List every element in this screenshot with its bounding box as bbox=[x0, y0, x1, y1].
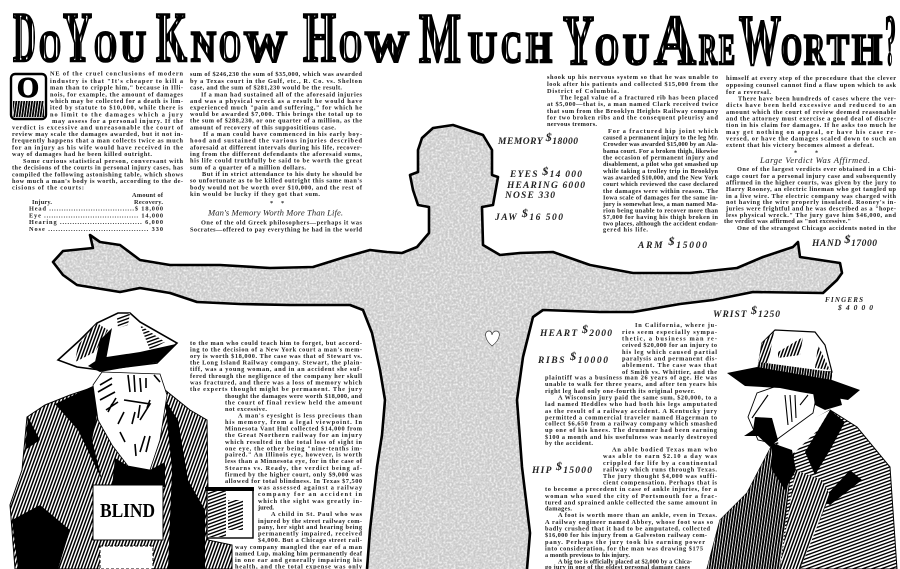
text: lower left panel: to the man who could teach him to forget, but accord- bbox=[190, 340, 362, 347]
moustache bbox=[744, 417, 778, 447]
body part value labels: $ bbox=[844, 232, 851, 246]
text column 3: look after his patients and collected $15,000 from the bbox=[547, 81, 718, 88]
text column 4 end: affirmed in the higher courts, was given by the jury to bbox=[726, 180, 896, 186]
text column 4: There have been hundreds of cases where the ver- bbox=[738, 96, 896, 102]
text: lower right panel bbox=[545, 322, 718, 569]
title: C bbox=[501, 25, 522, 72]
text: lower right panel: thetic, a business man re- bbox=[622, 336, 717, 342]
text column 3: Crowder was awarded $15,000 by an Ala- bbox=[603, 141, 718, 148]
text: lower right panel: of Smith vs. Whittier, and the bbox=[622, 369, 717, 376]
text: lower left panel: permanently impaired, received bbox=[258, 530, 362, 538]
text: lower right panel: In California, where ju- bbox=[635, 322, 717, 329]
sign: blind bbox=[93, 485, 163, 540]
text column 1: Some curious statistical person, conversant with bbox=[23, 158, 183, 165]
text column 2: would be awarded $7,000. This brings the total up to bbox=[190, 111, 362, 118]
hat brim bbox=[727, 367, 860, 400]
recovery table: Hearing ................................. 6,000 bbox=[29, 219, 163, 226]
body part value labels: 16 500 bbox=[529, 213, 563, 223]
text column 4 end: in a live wire. The electric company was charged with bbox=[726, 193, 896, 200]
text column 1: compiled the following astonishing table, which shows bbox=[12, 171, 184, 178]
text column 2 end: One of the old Greek philosophers—perhaps it was bbox=[201, 220, 363, 226]
title: W bbox=[244, 24, 287, 71]
text column 2: * bbox=[281, 200, 284, 207]
text column 4 end: not having the wire properly insulated. Rooney's in- bbox=[726, 199, 896, 206]
text: lower left panel: the Great Northern railway for an injury bbox=[225, 432, 363, 439]
text column 4 end: One of the largest verdicts ever obtained in a Chi- bbox=[737, 166, 896, 173]
title: W bbox=[365, 24, 409, 71]
text: lower right panel: was able to earn $2.10 a day was bbox=[603, 453, 718, 460]
text column 1: man than to cripple him," because in Illi- bbox=[50, 85, 183, 92]
text: lower right panel: A railway engineer named Abbey, whose foot was so bbox=[545, 519, 713, 526]
text column 3: disablement, a pilot who got smashed up bbox=[603, 161, 718, 168]
text: lower left panel: way company mangled the ear of a man bbox=[235, 544, 362, 551]
text: lower right panel: a month previous to his injury. bbox=[545, 552, 630, 559]
text column 4: extent that his victory becomes almost a defeat. bbox=[726, 142, 874, 149]
text: lower right panel: railway which runs through Texas. bbox=[603, 466, 717, 474]
text column 2: hood and sustained the various injuries described bbox=[190, 138, 362, 145]
text column 2 end bbox=[190, 220, 363, 234]
text: lower left panel: the Long Island Railway company. Stewart, the plain- bbox=[190, 360, 362, 366]
body part value labels: 14 000 bbox=[550, 170, 582, 180]
text column 1: ited by statute to $10,000, while there is bbox=[50, 105, 184, 112]
text: lower right panel: ablement. The case was that bbox=[622, 362, 718, 369]
text column 2: body would not be worth over $10,000, and the rest of bbox=[190, 184, 363, 191]
text: lower right panel: paralysis and permanent dis- bbox=[622, 356, 717, 362]
text: lower left panel: one eye, the other being "nine-tenths im- bbox=[225, 446, 362, 452]
title: O bbox=[339, 24, 362, 71]
text column 3: was awarded $10,000, and the New York bbox=[603, 174, 718, 182]
text: lower left panel: less than a Minnesota eye, for in the case of bbox=[225, 458, 363, 465]
body part value labels: 17000 bbox=[851, 239, 877, 249]
text column 3: Iowa scale of damages for the same in- bbox=[603, 194, 718, 202]
vest and dark lapel bbox=[707, 443, 795, 569]
body part value labels: HIP bbox=[532, 466, 551, 476]
text: lower right panel: cient compensation. Perhaps that is bbox=[603, 480, 718, 486]
text: lower left panel: firmed by the higher court, only $9,000 was bbox=[225, 472, 363, 478]
text: lower left panel: his memory, from a legal viewpoint. In bbox=[225, 419, 362, 426]
coat bbox=[707, 410, 897, 569]
recovery table: Eye ....................................... 14,000 bbox=[29, 212, 163, 220]
text column 2: If a man could have commenced in his early boy- bbox=[203, 131, 362, 138]
body part value labels: EYES bbox=[510, 170, 538, 180]
illustration: man in hat bbox=[707, 330, 897, 569]
text column 3: $7,000 for having his thigh broken in bbox=[603, 214, 718, 221]
text: lower left panel: thought the damages were worth $18,000, and bbox=[225, 393, 362, 400]
title: U bbox=[120, 24, 146, 71]
text: lower left panel: $4,000. But a Chicago street rail- bbox=[258, 537, 362, 544]
text: lower left panel: company for an accident in bbox=[258, 491, 362, 498]
recovery table: Recovery. bbox=[134, 199, 163, 206]
beard bbox=[93, 372, 167, 470]
title bbox=[13, 0, 896, 80]
text: lower right panel: to become a precedent in case of ankle injuries, for a bbox=[545, 486, 718, 493]
text column 1: industry is that "It's cheaper to kill a bbox=[50, 78, 184, 85]
text: lower left panel: ing to the decision of a New York court a man's mem- bbox=[190, 346, 362, 354]
text column 2: his life could truthfully be said to be worth the great bbox=[190, 158, 363, 165]
body silhouette bbox=[53, 125, 842, 569]
text column 2: aforesaid at different intervals during his life, recover- bbox=[190, 144, 362, 151]
text column 3: District of Columbia. bbox=[547, 88, 619, 95]
recovery table: Head ...................................$ 18,000 bbox=[29, 206, 163, 212]
recovery table: Amount of bbox=[132, 192, 164, 199]
body part value labels: NOSE 330 bbox=[504, 191, 555, 201]
crown hatching bbox=[758, 332, 830, 370]
text: lower right panel: $16,000 for his injury from a Galveston railway com- bbox=[545, 532, 707, 539]
text column 2: by a Texas court in the Gulf, etc., R. Co. vs. Shelton bbox=[190, 78, 362, 85]
text column 2: * bbox=[270, 200, 273, 207]
text: lower left panel: A man's eyesight is less precious than bbox=[238, 412, 362, 420]
text column 3: shook up his nervous system so that he was unable to bbox=[547, 74, 718, 81]
text: lower right panel: $100 a month and his usefulness was nearly destroyed bbox=[545, 434, 717, 441]
scarf bbox=[100, 546, 153, 569]
text column 1: the decisions of the courts in personal injury cases, has bbox=[12, 165, 184, 172]
text: lower right panel: The jury thought $4,000 was suffi- bbox=[603, 473, 717, 480]
text column 3: gered his life. bbox=[603, 226, 648, 234]
text: lower right panel: collect $6,650 from a railway company which smashed bbox=[545, 420, 717, 428]
title: R bbox=[699, 27, 718, 74]
title: A bbox=[654, 2, 696, 80]
text column 2: experienced much "pain and suffering," for which he bbox=[190, 105, 362, 112]
text column 3: the damages were within reason. The bbox=[603, 188, 718, 195]
text column 2: sum of $246,230 the sum of $35,000, which was awarded bbox=[190, 71, 362, 78]
recovery table: Injury. bbox=[32, 199, 52, 206]
text: lower right panel: A big toe is officially placed at $2,000 by a Chica- bbox=[558, 558, 692, 566]
text: lower right panel: tured and sprained ankle collected the same amount in bbox=[545, 500, 717, 506]
title: W bbox=[739, 2, 781, 80]
text column 1: way of damages had he been killed outright. bbox=[12, 151, 152, 158]
text column 4: may get nothing on appeal, or have his case re- bbox=[726, 129, 896, 136]
text: lower left panel: tiff, was a young woman, and in an accident she suf- bbox=[190, 366, 362, 373]
text column 3: caused a permanent injury to the leg Mr. bbox=[603, 134, 718, 142]
body part value labels: 10000 bbox=[578, 356, 608, 366]
text column 4 end bbox=[724, 166, 897, 232]
hat band bbox=[758, 362, 832, 382]
text: lower right panel: his leg which caused partial bbox=[622, 349, 717, 356]
text column 4: * bbox=[815, 150, 818, 156]
hat crown bbox=[758, 330, 832, 372]
text: lower left panel: fered through the negligence of the company her skull bbox=[190, 373, 362, 380]
title: R bbox=[804, 27, 826, 74]
title: H bbox=[303, 0, 336, 77]
face hatching bbox=[752, 395, 808, 425]
dark coat shadows bbox=[12, 385, 205, 569]
chest shadow bbox=[112, 458, 165, 487]
text: lower right panel: woman who sued the city of Portsmouth for a frac- bbox=[545, 493, 717, 500]
text: lower left panel: pany, her sight and hearing being bbox=[258, 524, 363, 531]
text column 4: and the attorney must exercise a good deal of discre- bbox=[726, 116, 896, 122]
text column 2: sum of a quarter of a million dollars. bbox=[190, 164, 306, 171]
title: K bbox=[156, 0, 187, 77]
body part value labels: FINGERS bbox=[825, 296, 863, 304]
text column 2 end: Socrates—offered to pay everything he had in the world bbox=[190, 226, 362, 234]
text column 4 end: cago court for a personal injury case and subsequently bbox=[726, 173, 897, 180]
text column 4: opposing counsel cannot find a flaw upon which to ask bbox=[726, 82, 896, 89]
text: lower left panel: which resulted in the total loss of sight in bbox=[225, 439, 362, 446]
text: lower right panel: A foot is worth more than an ankle, even in Texas. bbox=[558, 512, 717, 519]
text: lower left panel: Minnesota Vant Hul collected $14,000 from bbox=[225, 426, 363, 432]
text: lower right panel: badly crushed that it had to be amputated, collected bbox=[545, 526, 710, 532]
text column 3: court which reviewed the case declared bbox=[603, 181, 718, 188]
text: lower right panel: right leg had only one-fourth its original power. bbox=[545, 388, 695, 395]
body part value labels: $ bbox=[555, 459, 562, 473]
title: U bbox=[468, 25, 497, 72]
text: lower right panel: damages. bbox=[545, 506, 572, 512]
text: lower left panel: the court of final review held the amount bbox=[225, 400, 363, 406]
body part value labels: 1250 bbox=[758, 310, 780, 320]
text: lower right panel: into consideration, for the man was drawing $175 bbox=[545, 546, 703, 552]
body part value labels: WRIST bbox=[713, 310, 747, 320]
heading: large verdict: Large Verdict Was Affirmed. bbox=[759, 155, 870, 165]
text column 4 end: the verdict was affirmed as "not excessive." bbox=[724, 218, 851, 225]
body part value labels: $4000 bbox=[837, 303, 873, 312]
text column 2: so unfortunate as to be killed outright this same man's bbox=[190, 178, 363, 185]
text: lower right panel: lad named Heddles who had both his legs amputated bbox=[545, 401, 717, 408]
text column 4 end: One of the strangest Chicago accidents noted in the bbox=[737, 225, 896, 232]
text column 4 end: less physical wreck." The jury gave him $46,000, and bbox=[726, 212, 896, 219]
text: lower right panel: up one of his knees. The drummer had been earning bbox=[545, 427, 718, 434]
text: lower left panel: the experts thought might be permanent. The jury bbox=[190, 386, 363, 393]
text column 1: which may be collected for a death is lim- bbox=[50, 98, 183, 105]
text: lower left panel: not excessive. bbox=[225, 406, 267, 413]
text column 3: the occasion of permanent injury and bbox=[603, 154, 718, 162]
text column 4: dicts have been held excessive and reduced to an bbox=[726, 102, 896, 109]
text: lower right panel: plaintiff was a business man 26 years of age. He was bbox=[545, 374, 718, 382]
title: N bbox=[191, 24, 216, 71]
text: lower left panel: was assessed against a railway bbox=[258, 484, 363, 492]
body part value labels: $ bbox=[569, 349, 576, 363]
lapel hatching bbox=[780, 470, 830, 569]
body part value labels: HAND bbox=[812, 239, 841, 249]
text column 4: for a reversal. bbox=[726, 89, 771, 96]
text column 4: himself at every step of the procedure that the clever bbox=[726, 75, 896, 82]
body part value labels: 18000 bbox=[552, 137, 578, 147]
text column 2: But if in strict attendance to his duty he should be bbox=[202, 171, 362, 178]
body part value labels: MEMORY bbox=[498, 137, 542, 147]
text column 4: amount which the court of review deemed reasonable bbox=[726, 109, 896, 116]
text column 3: jury is somewhat less, a man named Ma- bbox=[602, 201, 718, 208]
text: lower right panel: unable to walk for three years, and after ten years his bbox=[545, 381, 718, 388]
text column 3: for two broken ribs and the consequent pleurisy and bbox=[547, 114, 718, 122]
hair bbox=[812, 386, 842, 410]
recovery table: Nose ........................................ 330 bbox=[29, 226, 163, 233]
body part value labels: RIBS bbox=[538, 356, 565, 366]
text column 1 bbox=[12, 70, 184, 192]
text column 2: the sum of $288,230, or one quarter of a million, as the bbox=[190, 118, 362, 125]
title: E bbox=[719, 27, 735, 74]
text: lower right panel: An able bodied Texas man who bbox=[612, 446, 717, 454]
title: M bbox=[419, 0, 461, 78]
text column 1: may assess for a personal injury. If the bbox=[52, 118, 183, 125]
text: lower left panel: A child in St. Paul who was bbox=[271, 511, 363, 518]
text: lower right panel: permitted a commercial traveler named Hagerman to bbox=[545, 414, 717, 422]
recovery table bbox=[29, 192, 164, 233]
title: H bbox=[526, 25, 552, 72]
body part value labels: $ bbox=[521, 206, 528, 220]
title: Y bbox=[563, 2, 594, 80]
text: lower left panel: injured by the street railway com- bbox=[258, 518, 362, 525]
text column 3: The legal value of a fractured rib has been placed bbox=[560, 94, 718, 102]
text column 4 bbox=[726, 75, 896, 156]
text column 2: amount of recovery of this supposititious case. bbox=[190, 124, 336, 131]
text column 3: nervous tremors. bbox=[547, 121, 597, 128]
body part value labels: $ bbox=[541, 164, 548, 178]
body part value labels: JAW bbox=[495, 213, 516, 223]
text column 4 end: Harry Rooney, an electric lineman who got tangled up bbox=[726, 186, 896, 193]
text: lower right panel: crippled for life by a continental bbox=[603, 460, 717, 467]
face bbox=[748, 385, 817, 443]
text column 4 end: juries were frightful and he was described as a "hope- bbox=[725, 206, 896, 212]
text: lower left panel: jured. bbox=[257, 504, 274, 512]
drop cap O bbox=[11, 73, 46, 119]
body part value labels: ARM bbox=[638, 241, 663, 251]
text column 1: for an injury as his wife would have received in the bbox=[12, 144, 183, 151]
hat hatching bbox=[75, 323, 108, 362]
hat band bbox=[88, 328, 176, 372]
text column 3: that sum from the Brooklyn Heights Railway company bbox=[547, 108, 719, 115]
text column 2: and was a physical wreck as a result he would have bbox=[190, 98, 362, 105]
text: lower left panel: ory is worth $18,000. The case was that of Stewart vs. bbox=[190, 353, 362, 360]
text column 2: case, and the sum of $281,230 would be the result. bbox=[190, 85, 342, 92]
text column 2 bbox=[190, 71, 363, 207]
text: lower left panel: which the sight was greatly in- bbox=[258, 498, 362, 505]
text column 4: tion in his claim for damages. If he asks too much he bbox=[726, 122, 896, 129]
body part value labels: HEARING 6000 bbox=[506, 181, 585, 191]
title: O bbox=[595, 27, 619, 74]
sign text: BLIND bbox=[100, 500, 155, 522]
text column 1: NE of the cruel conclusions of modern bbox=[50, 70, 183, 78]
text: lower right panel: ries seem especially sympa- bbox=[622, 329, 717, 336]
body part value labels: $ bbox=[668, 234, 675, 248]
text: lower left panel: allowed for total blindness. In Texas $7,500 bbox=[225, 478, 362, 485]
text: lower left panel: paired." An Illinois eye, however, is worth bbox=[225, 452, 362, 458]
text column 1: how much a man's body is worth, according to the de- bbox=[12, 178, 183, 185]
text column 1: nois, for example, the amount of damages bbox=[50, 91, 184, 98]
text column 1: verdict is excessive and unreasonable the court of bbox=[12, 124, 184, 131]
illustration: blind man bbox=[10, 313, 254, 569]
body part value labels: HEART bbox=[540, 329, 577, 339]
collar bbox=[777, 410, 830, 460]
hat crease bbox=[117, 313, 165, 350]
text: lower left panel: was fractured, and there was a loss of memory which bbox=[190, 380, 362, 386]
text column 1: frequently happens that a man collects twice as much bbox=[12, 138, 183, 145]
title: H bbox=[852, 27, 882, 74]
icon: heart bbox=[486, 331, 499, 346]
title: U bbox=[623, 27, 649, 74]
text column 2: kin would be lucky if they got that sum. bbox=[190, 191, 320, 198]
title: Y bbox=[63, 0, 92, 77]
text column 4: versed, or have the damages scaled down to such an bbox=[726, 136, 896, 142]
face and beard hatching bbox=[98, 375, 160, 456]
body part value labels: 15000 bbox=[676, 241, 707, 251]
text: lower right panel: as the result of a railway accident. A Kentucky jury bbox=[545, 408, 718, 415]
title: O bbox=[39, 24, 61, 71]
heading: memory: Man's Memory Worth More Than Life. bbox=[207, 208, 343, 218]
text: lower left panel: in one ear and generally impairing his bbox=[235, 557, 363, 564]
text column 1: no limit to the damages which a jury bbox=[50, 111, 184, 118]
text column 3: two places, although the accident endan- bbox=[603, 220, 718, 228]
text column 1: review may scale the damages awarded, but it not in- bbox=[12, 131, 183, 138]
drop cap O: O bbox=[17, 73, 39, 104]
body part value labels: 2000 bbox=[588, 329, 612, 339]
text: lower left panel bbox=[190, 340, 363, 569]
text: lower right panel: pany. Perhaps the jury took his earning power bbox=[545, 539, 705, 546]
text column 2: If a man had sustained all of the aforesaid injuries bbox=[201, 91, 363, 98]
title: O bbox=[781, 27, 802, 74]
text: lower right panel: A Wisconsin jury paid the same sum, $20,000, to a bbox=[558, 394, 718, 402]
title: D bbox=[13, 0, 36, 77]
text column 2: ing from the different defendants the aforesaid sums, bbox=[190, 151, 362, 158]
hat bbox=[58, 313, 177, 370]
text column 3: rion being unable to recover more than bbox=[603, 208, 718, 214]
body part value labels: $ bbox=[581, 322, 588, 336]
text: lower right panel: ceived $20,000 for an injury to bbox=[622, 342, 717, 349]
coat bbox=[10, 385, 232, 569]
lapel shadow bbox=[805, 410, 862, 505]
text column 3: at $5,000—that is, a man named Clark received twice bbox=[547, 101, 718, 108]
text column 3: while taking a trolley trip in Brooklyn bbox=[603, 168, 718, 175]
text: lower left panel: Stearns vs. Ready, the verdict being af- bbox=[225, 465, 362, 472]
tie bbox=[772, 443, 796, 490]
text column 3: bama court. For a broken thigh, likewise bbox=[603, 148, 718, 155]
body part value labels bbox=[494, 130, 877, 476]
title: O bbox=[219, 24, 241, 71]
body part value labels: 15000 bbox=[563, 466, 592, 476]
text: lower left panel: named Lup, making him permanently deaf bbox=[235, 550, 363, 558]
text column 1: cisions of the courts: bbox=[12, 185, 84, 192]
body part value labels: $ bbox=[750, 303, 757, 317]
text column 4: * bbox=[794, 150, 797, 156]
title: O bbox=[94, 24, 117, 71]
body part value labels: $ bbox=[545, 130, 552, 144]
title: T bbox=[827, 27, 849, 74]
text column 3: For a fractured hip joint which bbox=[608, 128, 718, 135]
text: lower right panel: by the accident. bbox=[545, 440, 593, 447]
text column 3 bbox=[547, 74, 719, 234]
tin cup bbox=[205, 487, 254, 538]
